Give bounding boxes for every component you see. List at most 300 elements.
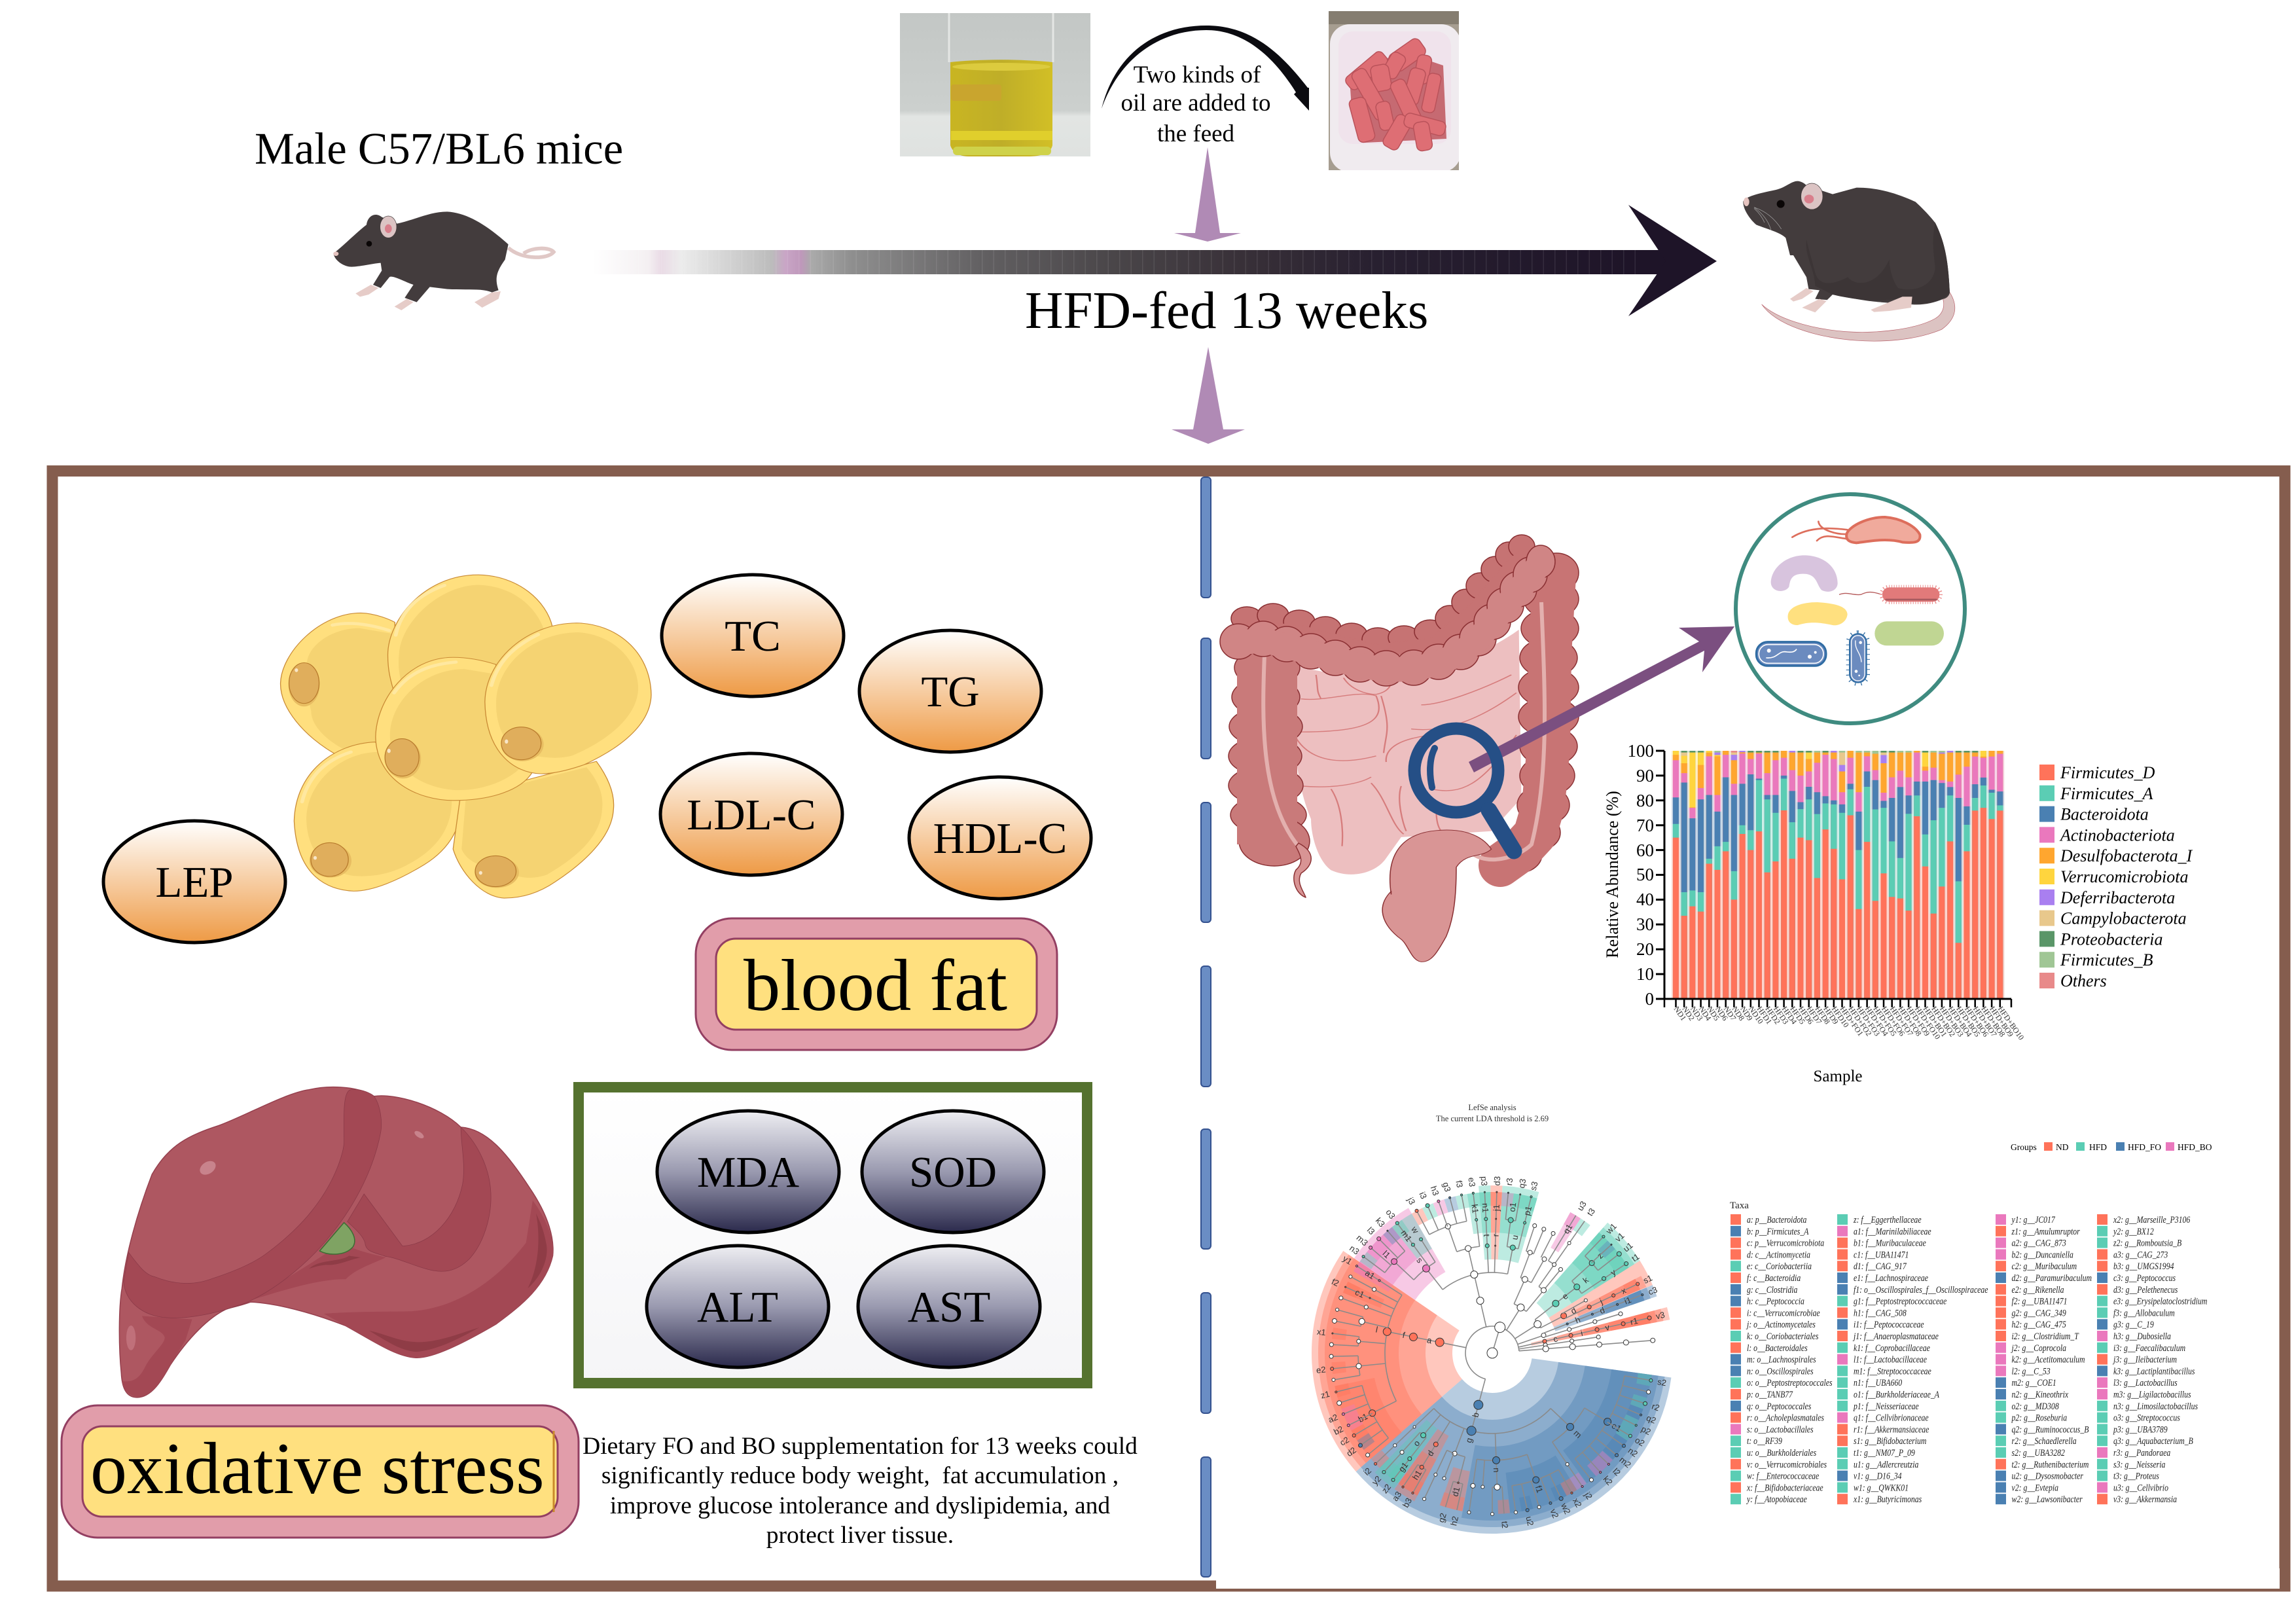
- dendrogram nodes and labels: o1: [1507, 1202, 1518, 1212]
- marker: TC: [662, 575, 844, 696]
- dendrogram nodes and labels: e: [1560, 1291, 1570, 1301]
- marker: LEP: [103, 821, 285, 943]
- dendrogram nodes and labels: h3: [1429, 1185, 1441, 1197]
- taxa column 3: r2: g__Schaedlerella: [2012, 1435, 2077, 1447]
- x-axis sample labels: HFD+FO2: [1846, 1005, 1874, 1038]
- taxa column 1: c: p__Verrucomicrobiota: [1747, 1237, 1824, 1248]
- marker: LEP: LEP: [155, 858, 234, 907]
- taxa column 2: q1: f__Cellvibrionaceae: [1854, 1412, 1929, 1423]
- taxa column 1: s: o__Lactobacillales: [1747, 1424, 1814, 1435]
- taxa column 3: m2: g__COE1: [2012, 1377, 2056, 1388]
- red phylum: l: [1375, 1324, 1379, 1335]
- taxa column 4: u3: g__Cellvibrio: [2113, 1482, 2168, 1493]
- marker: HDL-C: HDL-C: [933, 814, 1067, 863]
- bacterium: green rod: [1874, 621, 1944, 645]
- x-axis sample labels: HFD+BO4: [1946, 1005, 1974, 1039]
- text: two kinds of oil: the feed: [1157, 120, 1235, 147]
- taxa column 1: q: o__Peptococcales: [1747, 1400, 1811, 1411]
- taxa column 4: [2097, 1214, 2208, 1505]
- red narrow phylum: c: [1552, 1333, 1559, 1344]
- taxa column 1: j: o__Actinomycetales: [1746, 1319, 1816, 1330]
- dendrogram nodes and labels: w1: [1604, 1221, 1619, 1236]
- taxa column 3: o2: g__MD308: [2012, 1400, 2059, 1411]
- taxa column 2: e1: f__Lachnospiraceae: [1854, 1272, 1928, 1283]
- taxa column 1: y: f__Atopobiaceae: [1746, 1494, 1807, 1505]
- taxa column 3: b2: g__Duncaniella: [2012, 1249, 2073, 1260]
- dendrogram nodes and labels: z: [1595, 1250, 1605, 1261]
- taxa column 4: e3: g__Erysipelatoclostridium: [2113, 1295, 2208, 1307]
- x-axis sample labels: HFD10: [1830, 1005, 1851, 1029]
- root: [1487, 1321, 1507, 1354]
- chart: relative abundance stacked bars: 50: [1636, 865, 1654, 884]
- blue phylum: [1463, 1378, 1490, 1444]
- taxa column 3: [1996, 1214, 2092, 1505]
- arrow: purple downward, feed into timeline: [1174, 147, 1241, 242]
- dendrogram nodes and labels: t3: [1585, 1206, 1597, 1218]
- taxa column 4: s3: g__Neisseria: [2113, 1458, 2166, 1470]
- icon: liver: [119, 1087, 553, 1398]
- taxa column 1: g: c__Clostridia: [1747, 1284, 1798, 1295]
- marker: MDA: MDA: [697, 1148, 799, 1197]
- taxa column 4: h3: g__Dubosiella: [2113, 1331, 2171, 1341]
- dendrogram nodes and labels: a3: [1390, 1490, 1403, 1503]
- x-axis sample labels: HFD+FO10: [1913, 1005, 1943, 1041]
- dendrogram nodes and labels: k3: [1374, 1216, 1387, 1229]
- taxa column 2: k1: f__Coprobacillaceae: [1854, 1342, 1930, 1353]
- dendrogram nodes and labels: g2: [1436, 1512, 1448, 1524]
- legend: phyla: Deferribacterota: [2060, 888, 2175, 907]
- x-axis sample labels: HFD+BO7: [1971, 1005, 1999, 1039]
- bacterium: yellow bean: [1788, 602, 1848, 625]
- chart: relative abundance stacked bars: 40: [1636, 890, 1654, 909]
- x-axis sample labels: HFD+FO7: [1888, 1005, 1915, 1038]
- taxa column 3: q2: g__Ruminococcus_B: [2012, 1424, 2089, 1435]
- taxa column 1: [1731, 1214, 1833, 1505]
- marker: TG: TG: [921, 668, 980, 716]
- legend: LEfSe groups: HFD: [2089, 1142, 2107, 1152]
- dendrogram nodes and labels: m1: [1399, 1228, 1414, 1244]
- title: Male C57/BL6 mice: Male C57/BL6 mice: [255, 124, 623, 173]
- taxa column 4: z2: g__Romboutsia_B: [2113, 1237, 2181, 1248]
- label: oxidative stress: [62, 1405, 579, 1538]
- taxa column 2: j1: f__Anaeroplasmataceae: [1852, 1331, 1939, 1341]
- dendrogram nodes and labels: r: [1490, 1233, 1501, 1236]
- taxa column 4: d3: g__Pelethenecus: [2113, 1284, 2178, 1295]
- dendrogram nodes and labels: y1: [1341, 1254, 1354, 1267]
- red phylum: a: [1426, 1335, 1433, 1346]
- label: HFD-fed 13 weeks: HFD-fed 13 weeks: [1025, 281, 1428, 340]
- chart: relative abundance stacked bars: 30: [1636, 914, 1654, 934]
- panel: gut microbes circle: [1736, 494, 1965, 723]
- dendrogram nodes and labels: o3: [1384, 1208, 1397, 1221]
- colon: front of transverse: [1220, 545, 1555, 686]
- dendrogram nodes and labels: g3: [1441, 1181, 1453, 1193]
- dendrogram nodes and labels: m3: [1354, 1233, 1370, 1248]
- dendrogram nodes and labels: k2: [1601, 1474, 1615, 1487]
- x-axis sample labels: HFD+BO2: [1929, 1005, 1957, 1039]
- icon: adipocyte cluster: [281, 575, 651, 898]
- bacterium: blue capsule: [1756, 642, 1826, 666]
- dendrogram nodes and labels: l3: [1365, 1225, 1377, 1236]
- red class: [1538, 1305, 1578, 1332]
- taxa column 2: c1: f__UBA11471: [1854, 1249, 1909, 1260]
- taxa column 1: t: o__RF39: [1747, 1435, 1782, 1447]
- red narrow phylum: v: [1604, 1322, 1611, 1333]
- dendrogram nodes and labels: j3: [1405, 1195, 1418, 1206]
- legend: phyla: [2039, 763, 2193, 990]
- taxa column 3: t2: g__Ruthenibacterium: [2012, 1458, 2089, 1470]
- taxa column 2: r1: f__Akkermansiaceae: [1854, 1424, 1929, 1435]
- marker: TG: [859, 630, 1041, 752]
- dendrogram nodes and labels: p1: [1522, 1205, 1534, 1216]
- taxa column 2: s1: g__Bifidobacterium: [1854, 1435, 1927, 1447]
- dendrogram nodes and labels: b1: [1357, 1411, 1369, 1424]
- taxa column 4: v3: g__Akkermansia: [2113, 1494, 2177, 1505]
- marker: AST: [858, 1246, 1040, 1367]
- colon: back of transverse: [1231, 535, 1538, 655]
- taxa column 4: i3: g__Faecalibaculum: [2113, 1342, 2185, 1353]
- red narrow phylum: v3: [1655, 1310, 1666, 1321]
- x-axis sample labels: HFD+FO6: [1880, 1005, 1907, 1038]
- taxa column 2: o1: f__Burkholderiaceae_A: [1854, 1389, 1940, 1399]
- taxa column 3: a2: g__CAG_873: [2012, 1237, 2066, 1248]
- divider: blue dashed line: [1201, 477, 1211, 1577]
- red phylum: f: [1401, 1330, 1406, 1340]
- taxa column 1: b: p__Firmicutes_A: [1747, 1225, 1809, 1236]
- curved arrow: oil to feed: [1102, 26, 1309, 111]
- legend: LEfSe groups: Groups: [2011, 1142, 2037, 1152]
- taxa column 1: k: o__Coriobacteriales: [1747, 1331, 1818, 1341]
- taxa column 4: j3: g__Ileibacterium: [2112, 1354, 2177, 1365]
- x-axis sample labels: HFD+FO8: [1896, 1005, 1924, 1038]
- bacterium: red flagellated: [1792, 517, 1920, 543]
- taxa column 1: x: f__Bifidobacteriaceae: [1746, 1482, 1823, 1493]
- dendrogram nodes and labels: h1: [1410, 1468, 1424, 1481]
- dendrogram nodes and labels: d: [1425, 1449, 1436, 1458]
- taxa column 3: e2: g__Rikenella: [2012, 1284, 2064, 1295]
- taxa column 3: d2: g__Paramuribaculum: [2012, 1272, 2092, 1283]
- dendrogram nodes and labels: x1: [1316, 1327, 1327, 1337]
- heading: LEfSe title: The current LDA threshold is 2.69: [1436, 1114, 1549, 1123]
- image: beaker of yellow oil: [900, 13, 1090, 156]
- taxa column 4: x2: g__Marseille_P3106: [2113, 1214, 2190, 1225]
- dendrogram nodes and labels: f2: [1330, 1276, 1340, 1288]
- chart: relative abundance stacked bars: 0: [1645, 989, 1654, 1009]
- taxa column 3: z1: g__Amulumruptor: [2011, 1225, 2080, 1236]
- icon: obese black mouse: [1743, 181, 1955, 341]
- x-axis sample labels: HFD6: [1797, 1005, 1816, 1026]
- dendrogram nodes and labels: t1: [1630, 1252, 1641, 1263]
- dendrogram nodes and labels: a1: [1363, 1268, 1376, 1281]
- dendrogram nodes and labels: f1: [1534, 1484, 1545, 1494]
- taxa column 1: d: c__Actinomycetia: [1747, 1249, 1810, 1260]
- dendrogram nodes and labels: j: [1598, 1297, 1604, 1307]
- chart: relative abundance stacked bars: 20: [1636, 939, 1654, 959]
- x-axis sample labels: [1672, 1005, 2026, 1041]
- taxa column 2: p1: f__Neisseriaceae: [1853, 1400, 1919, 1411]
- dendrogram nodes and labels: s2: [1657, 1377, 1667, 1388]
- taxa column 2: w1: g__QWKK01: [1854, 1482, 1909, 1493]
- taxa column 3: k2: g__Acetitomaculum: [2012, 1354, 2085, 1365]
- red narrow phylum: i: [1580, 1328, 1584, 1338]
- taxa column 2: a1: f__Marinilabiliaceae: [1854, 1225, 1931, 1236]
- taxa column 2: [1837, 1214, 1988, 1505]
- taxa column 1: m: o__Lachnospirales: [1747, 1354, 1816, 1365]
- text: conclusion paragraph: improve glucose intolerance and dyslipidemia, and: [610, 1492, 1110, 1519]
- taxa column 2: f1: o__Oscillospirales_f__Oscillospiraceae: [1854, 1284, 1988, 1295]
- taxa column 2: i1: f__Peptococcaceae: [1854, 1319, 1924, 1330]
- dendrogram nodes and labels: g1: [1397, 1460, 1410, 1473]
- taxa column 2: n1: f__UBA660: [1854, 1377, 1902, 1388]
- taxa column 4: p3: g__UBA3789: [2113, 1424, 2168, 1435]
- taxa column 4: r3: g__Pandoraea: [2113, 1447, 2170, 1458]
- dendrogram nodes and labels: u: [1509, 1234, 1520, 1240]
- taxa column 3: j2: g__Coprocola: [2011, 1342, 2066, 1353]
- marker: MDA: [657, 1111, 839, 1233]
- mesentery and small intestine: [1294, 630, 1521, 875]
- x-axis sample labels: HFD+FO9: [1905, 1005, 1932, 1038]
- x-axis sample labels: ND4: [1697, 1005, 1713, 1022]
- dendrogram nodes and labels: o: [1411, 1438, 1422, 1448]
- taxa column 1: n: o__Oscillospirales: [1747, 1365, 1814, 1377]
- dendrogram nodes and labels: v2: [1549, 1507, 1561, 1519]
- panel: liver biomarkers box: [579, 1087, 1087, 1383]
- dendrogram nodes and labels: s3: [1528, 1180, 1540, 1191]
- dendrogram nodes and labels: l1: [1381, 1248, 1392, 1260]
- dendrogram nodes and labels: d1: [1450, 1486, 1462, 1498]
- legend: phyla: Proteobacteria: [2060, 929, 2162, 948]
- x-axis sample labels: HFD+FO5: [1871, 1005, 1899, 1038]
- x-axis sample labels: HFD9: [1821, 1005, 1840, 1026]
- legend: phyla: Firmicutes_A: [2060, 784, 2153, 803]
- x-axis sample labels: HFD+BO1: [1922, 1005, 1949, 1039]
- taxa column 1: f: c__Bacteroidia: [1747, 1272, 1801, 1283]
- dendrogram nodes and labels: b2: [1332, 1424, 1345, 1437]
- taxa column 2: h1: f__CAG_508: [1854, 1307, 1907, 1318]
- text: two kinds of oil: Two kinds of: [1134, 62, 1261, 88]
- taxa column 4: t3: g__Proteus: [2113, 1470, 2159, 1481]
- marker: SOD: SOD: [909, 1148, 997, 1197]
- x-axis sample labels: ND10: [1747, 1005, 1765, 1026]
- legend: phyla: Campylobacterota: [2060, 909, 2187, 928]
- legend: LEfSe groups: ND: [2056, 1142, 2069, 1152]
- marker: HDL-C: [909, 777, 1091, 899]
- dendrogram nodes and labels: z2: [1380, 1482, 1393, 1495]
- taxa column 3: v2: g__Evtepia: [2012, 1482, 2058, 1493]
- dendrogram nodes and labels: k1: [1469, 1204, 1480, 1214]
- dendrogram nodes and labels: c3: [1647, 1284, 1659, 1297]
- chart: relative abundance stacked bars: 60: [1636, 840, 1654, 860]
- legend: phyla: Firmicutes_B: [2060, 950, 2153, 969]
- legend: LEfSe groups: HFD_FO: [2128, 1142, 2161, 1152]
- bacterium: hairy pink: [1839, 587, 1939, 602]
- x-axis sample labels: HFD+BO9: [1988, 1005, 2015, 1039]
- taxa column 4: f3: g__Allobaculum: [2113, 1307, 2175, 1318]
- taxa column 1: r: o__Acholeplasmatales: [1747, 1412, 1824, 1423]
- taxa column 2: t1: g__NM07_P_09: [1854, 1447, 1915, 1458]
- dendrogram nodes and labels: u3: [1575, 1199, 1588, 1212]
- x-axis sample labels: HFD+BO6: [1963, 1005, 1990, 1039]
- dendrogram nodes and labels: d: [1598, 1305, 1606, 1316]
- dendrogram nodes and labels: t: [1482, 1234, 1492, 1237]
- icon: intestine: [769, 0, 1579, 962]
- y-axis title: Relative Abundance (%): [1603, 791, 1622, 958]
- taxa column 3: y1: g__JC017: [2011, 1214, 2056, 1225]
- arrow: gradient HFD timeline: [592, 205, 1717, 316]
- dendrogram nodes and labels: n2: [1626, 1445, 1640, 1459]
- taxa column 1: p: o__TANB77: [1746, 1389, 1793, 1399]
- taxa column 3: n2: g__Kineothrix: [2012, 1389, 2068, 1399]
- arrow: purple, from magnifier to microbes: [1469, 626, 1734, 772]
- x-axis sample labels: HFD+BO10: [1996, 1005, 2026, 1041]
- text: two kinds of oil: oil are added to: [1121, 90, 1271, 117]
- taxa column 2: z: f__Eggerthellaceae: [1853, 1214, 1922, 1225]
- x-axis sample labels: HFD+BO5: [1954, 1005, 1982, 1039]
- dendrogram nodes and labels: q2: [1645, 1413, 1657, 1426]
- clade wedges: [1274, 1135, 1710, 1571]
- legend: phyla: Others: [2060, 971, 2107, 990]
- text: conclusion paragraph: significantly reduce body weight, fat accumulation ,: [601, 1462, 1119, 1489]
- taxa column 4: c3: g__Peptococcus: [2113, 1272, 2176, 1283]
- dendrogram nodes and labels: i1: [1623, 1295, 1632, 1307]
- legend: LEfSe groups: [2011, 1142, 2212, 1152]
- marker: ALT: [647, 1246, 829, 1367]
- panel: results frame: [52, 471, 2285, 1589]
- blue phylum: g: [1463, 1437, 1474, 1444]
- x-axis title: Sample: [1813, 1068, 1863, 1085]
- x-axis sample labels: ND2: [1680, 1005, 1696, 1022]
- x-axis sample labels: HFD+FO4: [1863, 1005, 1890, 1038]
- chart: relative abundance stacked bars: [1603, 741, 2193, 1085]
- taxa column 1: w: f__Enterococcaceae: [1747, 1470, 1819, 1481]
- bacterium: blue spiked rod: [1850, 634, 1867, 683]
- dendrogram nodes and labels: r2: [1651, 1401, 1661, 1413]
- x-axis sample labels: ND5: [1705, 1005, 1721, 1022]
- taxa column 4: y2: g__BX12: [2112, 1225, 2154, 1236]
- dendrogram nodes and labels: a2: [1327, 1412, 1339, 1424]
- label: blood fat: [696, 918, 1057, 1050]
- taxa column 2: g1: f__Peptostreptococcaceae: [1854, 1295, 1946, 1307]
- marker: TC: TC: [725, 612, 781, 660]
- dendrogram nodes and labels: w2: [1559, 1501, 1573, 1515]
- x-axis sample labels: HFD7: [1805, 1005, 1823, 1026]
- legend: LEfSe groups: HFD_BO: [2178, 1142, 2212, 1152]
- taxa column 2: l1: f__Lactobacillaceae: [1854, 1354, 1927, 1365]
- taxa column 3: f2: g__UBA11471: [2012, 1295, 2068, 1307]
- marker: ALT: ALT: [697, 1283, 778, 1331]
- dendrogram nodes and labels: s: [1414, 1255, 1425, 1265]
- taxa column 3: c2: g__Muribaculum: [2012, 1261, 2077, 1272]
- dendrogram nodes and labels: d3: [1492, 1176, 1502, 1186]
- taxa column 2: d1: f__CAG_917: [1854, 1261, 1907, 1272]
- dendrogram nodes and labels: [1302, 1163, 1682, 1543]
- x-axis sample labels: HFD3: [1772, 1005, 1791, 1026]
- dendrogram nodes and labels: q1: [1561, 1222, 1575, 1235]
- legend: phyla: Bacteroidota: [2060, 805, 2149, 824]
- taxa column 3: l2: g__C_53: [2012, 1365, 2051, 1377]
- dendrogram nodes and labels: r3: [1504, 1178, 1515, 1186]
- x-axis sample labels: ND3: [1689, 1005, 1705, 1022]
- blue phylum: b: [1470, 1411, 1481, 1418]
- dendrogram nodes and labels: c2: [1338, 1435, 1351, 1448]
- red phylum: [1375, 1324, 1467, 1352]
- marker: AST: AST: [908, 1283, 990, 1331]
- dendrogram nodes and labels: s1: [1641, 1272, 1654, 1286]
- dendrogram nodes and labels: x2: [1571, 1496, 1584, 1509]
- taxa column 1: e: c__Coriobacteriia: [1747, 1261, 1812, 1272]
- marker: LDL-C: LDL-C: [687, 791, 816, 839]
- legend: taxa list: Taxa: [1730, 1200, 1749, 1211]
- rectum: [1382, 830, 1492, 962]
- taxa column 1: i: c__Verrucomicrobiae: [1747, 1307, 1820, 1318]
- taxa column 3: s2: g__UBA3282: [2012, 1447, 2065, 1458]
- dendrogram nodes and labels: c1: [1354, 1287, 1366, 1300]
- chart: LEfSe cladogram: [1274, 1135, 1710, 1571]
- icon: lean black mouse: [333, 211, 554, 310]
- dendrogram nodes and labels: n3: [1348, 1243, 1361, 1257]
- colon: descending: [1469, 553, 1579, 885]
- dendrogram nodes and labels: p3: [1479, 1176, 1489, 1186]
- taxa column 1: l: o__Bacteroidales: [1747, 1342, 1808, 1353]
- x-axis sample labels: ND6: [1713, 1005, 1730, 1022]
- taxa column 1: u: o__Burkholderiales: [1747, 1447, 1816, 1458]
- dendrogram nodes and labels: n1: [1480, 1203, 1490, 1213]
- taxa column 1: o: o__Peptostreptococcales: [1747, 1377, 1833, 1388]
- dendrogram nodes and labels: p2: [1640, 1424, 1653, 1437]
- chart: relative abundance stacked bars: 80: [1636, 791, 1654, 810]
- text: conclusion paragraph: Dietary FO and BO supplementation for 13 weeks could: [583, 1433, 1138, 1460]
- taxa column 3: u2: g__Dysosmobacter: [2012, 1470, 2084, 1481]
- x-axis sample labels: HFD+FO1: [1839, 1005, 1865, 1038]
- legend: phyla: Actinobacteriota: [2059, 825, 2175, 844]
- x-axis sample labels: HFD+BO3: [1938, 1005, 1965, 1039]
- x-axis sample labels: ND9: [1738, 1005, 1755, 1022]
- taxa column 2: x1: g__Butyricimonas: [1853, 1494, 1922, 1505]
- dendrogram nodes and labels: m2: [1617, 1454, 1633, 1470]
- legend: taxa list: [1730, 1200, 2208, 1505]
- text: conclusion paragraph: protect liver tissue.: [766, 1522, 954, 1549]
- taxa column 2: u1: g__Adlercreutzia: [1854, 1458, 1919, 1470]
- dendrogram nodes and labels: h2: [1448, 1515, 1460, 1526]
- arrow: purple downward, into results frame: [1172, 347, 1245, 444]
- taxa column 1: h: c__Peptococcia: [1747, 1295, 1804, 1307]
- icon: magnifying glass: [1414, 729, 1514, 851]
- chart: relative abundance stacked bars: 10: [1636, 964, 1654, 984]
- taxa column 3: i2: g__Clostridium_T: [2012, 1331, 2079, 1341]
- dendrogram nodes and labels: u1: [1621, 1240, 1635, 1254]
- dendrogram nodes and labels: i2: [1361, 1466, 1373, 1477]
- taxa column 4: l3: g__Lactobacillus: [2113, 1377, 2178, 1388]
- dendrogram nodes and labels: y: [1609, 1267, 1618, 1278]
- legend: phyla: Firmicutes_D: [2060, 763, 2155, 782]
- x-axis sample labels: ND8: [1730, 1005, 1746, 1022]
- dendrogram nodes and labels: x: [1619, 1285, 1628, 1296]
- bacterium: lilac curved: [1771, 555, 1838, 592]
- taxa column 3: h2: g__CAG_475: [2012, 1319, 2066, 1330]
- dendrogram nodes and labels: n: [1492, 1468, 1501, 1473]
- dendrogram nodes and labels: w: [1409, 1224, 1421, 1235]
- taxa column 4: a3: g__CAG_273: [2113, 1249, 2168, 1260]
- taxa column 2: v1: g__D16_34: [1854, 1470, 1902, 1481]
- chart: relative abundance stacked bars: 90: [1636, 766, 1654, 785]
- white branches: [1503, 1303, 1526, 1332]
- teal class: [1513, 1319, 1543, 1342]
- x-axis sample labels: HFD4: [1780, 1005, 1799, 1026]
- dendrogram nodes and labels: e2: [1316, 1364, 1326, 1375]
- dendrogram nodes and labels: e3: [1467, 1177, 1477, 1187]
- colon: ascending: [769, 0, 1310, 866]
- dendrogram nodes and labels: q3: [1516, 1178, 1528, 1189]
